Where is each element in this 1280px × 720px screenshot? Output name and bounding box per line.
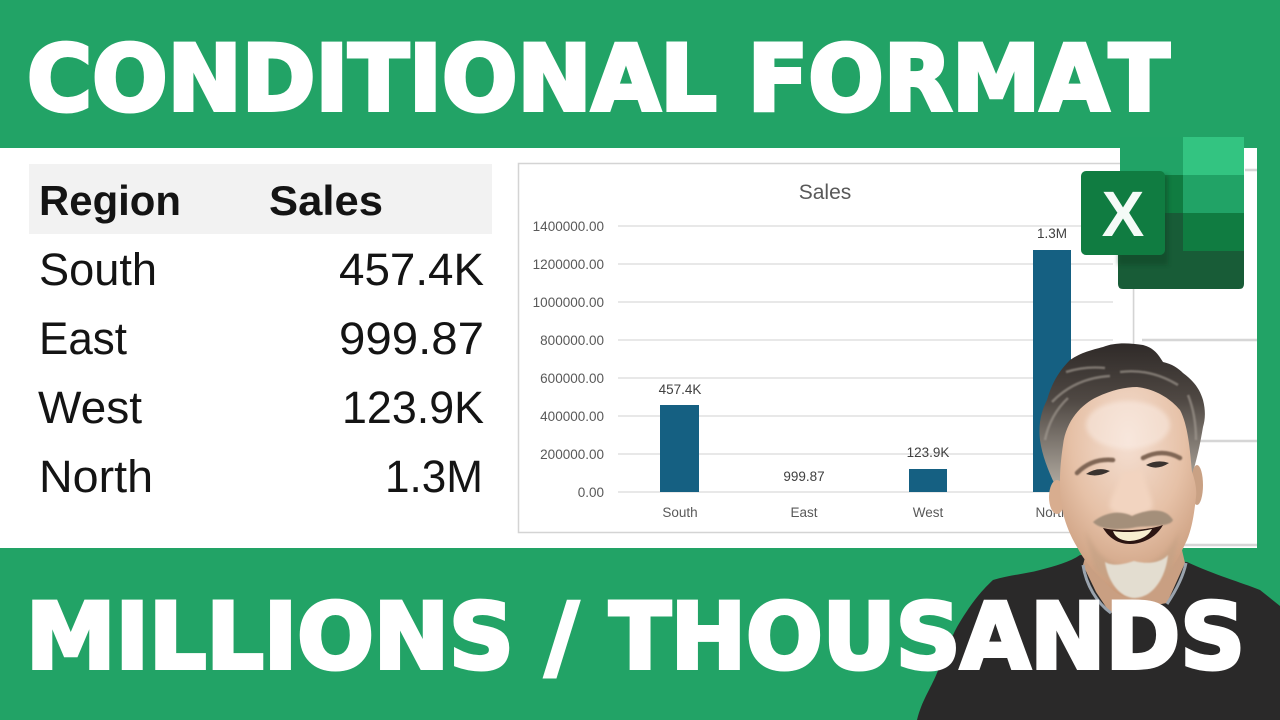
sweater — [917, 555, 1280, 720]
face — [1060, 387, 1196, 598]
data labels — [659, 226, 1067, 484]
data labels: 457.4K — [659, 382, 701, 397]
moustache — [1093, 510, 1173, 529]
y-axis labels: 200000.00 — [540, 447, 604, 462]
teeth — [1113, 529, 1152, 541]
icon: Excel logo — [1081, 137, 1244, 289]
table header: Sales — [269, 177, 383, 224]
ear right — [1191, 465, 1203, 505]
mouth — [1103, 525, 1163, 544]
hair highlights — [1045, 368, 1196, 440]
table row: East: East — [39, 313, 127, 364]
data labels: 999.87 — [783, 469, 825, 484]
eyes — [1086, 461, 1169, 475]
table row: South: 457.4K — [339, 244, 484, 295]
forehead highlight — [1086, 401, 1170, 449]
table row: North: 1.3M — [385, 451, 483, 502]
y-axis labels: 1400000.00 — [533, 219, 604, 234]
table row: South — [39, 244, 484, 295]
table row: North — [39, 451, 483, 502]
x-axis labels: West — [913, 505, 943, 520]
background worksheet lines — [1133, 170, 1257, 545]
ear — [1049, 480, 1065, 514]
eyebrows — [1077, 453, 1180, 473]
table row: East: 999.87 — [339, 313, 484, 364]
x-axis labels — [662, 505, 1069, 520]
hair — [1039, 343, 1205, 485]
stubble — [1085, 530, 1180, 600]
panel: sales table — [29, 164, 492, 502]
table row: East — [39, 313, 484, 364]
panel: column chart — [518, 164, 1134, 532]
neck — [1083, 520, 1185, 613]
bars — [660, 250, 1071, 492]
goatee — [1105, 555, 1168, 598]
title: bottom heading: MILLIONS / THOUSANDS — [26, 585, 1245, 690]
title: top heading: CONDITIONAL FORMAT — [27, 27, 1169, 132]
table header — [29, 164, 492, 234]
y-axis labels: 0.00 — [578, 485, 604, 500]
data labels: 123.9K — [907, 445, 949, 460]
table row: West: 123.9K — [342, 382, 484, 433]
table row: West — [38, 382, 484, 433]
x-axis labels: East — [790, 505, 818, 520]
icon: Excel logo: X — [1102, 178, 1145, 250]
y-axis labels: 600000.00 — [540, 371, 604, 386]
y-axis labels: 400000.00 — [540, 409, 604, 424]
presenter portrait — [917, 343, 1280, 720]
shirt collar — [1083, 563, 1186, 613]
table header: Region — [39, 177, 181, 224]
table row: North: North — [39, 451, 153, 502]
y-axis labels — [533, 219, 604, 500]
table row: West: West — [38, 382, 142, 433]
x-axis labels: South — [662, 505, 698, 520]
chart title: Sales — [799, 181, 851, 204]
nose — [1110, 470, 1152, 516]
y-axis labels: 1000000.00 — [533, 295, 604, 310]
x-axis labels: North — [1035, 505, 1069, 520]
table row: South: South — [39, 244, 157, 295]
y-axis labels: 1200000.00 — [533, 257, 604, 272]
y-axis labels: 800000.00 — [540, 333, 604, 348]
data labels: 1.3M — [1037, 226, 1067, 241]
panel: white content area — [0, 148, 1257, 548]
